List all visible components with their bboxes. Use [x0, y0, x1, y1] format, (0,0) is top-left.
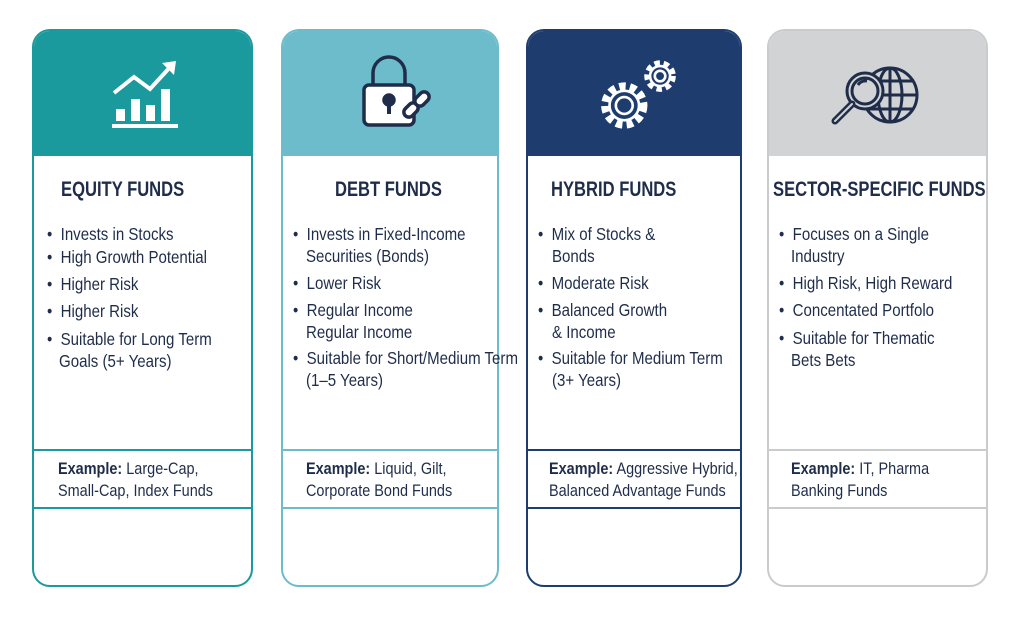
icon: lock and chain: [362, 55, 431, 127]
example: sector: [791, 459, 930, 500]
icon: magnifier and globe: [832, 66, 918, 124]
header: hybrid: [528, 31, 740, 156]
heading: hybrid: HYBRID FUNDS: [551, 178, 676, 201]
panel: sector-specific funds: • Concentated Portfolo: [779, 300, 934, 320]
example: sector: Example: IT, Pharma: [791, 459, 929, 478]
panel: equity funds: Goals (5+ Years): [59, 351, 172, 371]
panel: sector-specific funds: Industry: [791, 246, 845, 266]
panel: debt funds: Regular Income: [306, 322, 412, 342]
panel: sector-specific funds: [767, 29, 988, 587]
panel: hybrid funds: & Income: [552, 322, 616, 342]
panel: hybrid funds: Bonds: [552, 246, 595, 266]
example: sector: Banking Funds: [791, 481, 887, 500]
panel: debt funds: [281, 29, 499, 587]
bullets: sector: [779, 224, 952, 370]
example: equity: Example: Large-Cap,: [58, 459, 199, 478]
example: hybrid: Balanced Advantage Funds: [549, 481, 726, 500]
panel: equity funds: • Higher Risk: [47, 301, 138, 321]
panel: hybrid funds: • Mix of Stocks &: [538, 224, 655, 244]
panel: sector-specific funds: • Suitable for Thematic: [779, 328, 935, 348]
example: equity: [58, 459, 213, 500]
panel: hybrid funds: (3+ Years): [552, 370, 621, 390]
header: equity: [34, 31, 251, 156]
panel: equity funds: • High Growth Potential: [47, 247, 207, 267]
panel: equity funds: [32, 29, 253, 587]
panel: debt funds: • Invests in Fixed-Income: [293, 224, 466, 244]
example: debt: Example: Liquid, Gilt,: [306, 459, 447, 478]
example: equity: Small-Cap, Index Funds: [58, 481, 213, 500]
panel: debt funds: • Suitable for Short/Medium Term: [293, 348, 518, 368]
bullets: equity: [47, 224, 212, 371]
panel: hybrid funds: [526, 29, 742, 587]
bullets: hybrid: [538, 224, 723, 390]
example: debt: [306, 459, 452, 500]
panel: equity funds: • Suitable for Long Term: [47, 329, 212, 349]
example: hybrid: Example: Aggressive Hybrid,: [549, 459, 738, 478]
panel: debt funds: • Regular Income: [293, 300, 413, 320]
panel: hybrid funds: • Suitable for Medium Term: [538, 348, 723, 368]
panel: sector-specific funds: • High Risk, High Reward: [779, 273, 952, 293]
header: debt: [283, 31, 497, 156]
header: sector: [769, 31, 986, 156]
panel: debt funds: • Lower Risk: [293, 273, 381, 293]
heading: debt: DEBT FUNDS: [335, 178, 442, 201]
panel: sector-specific funds: Bets Bets: [791, 350, 855, 370]
panel: sector-specific funds: • Focuses on a Single: [779, 224, 929, 244]
heading: equity: EQUITY FUNDS: [61, 178, 184, 201]
example: debt: Corporate Bond Funds: [306, 481, 452, 500]
panel: debt funds: Securities (Bonds): [306, 246, 429, 266]
panel: equity funds: • Higher Risk: [47, 274, 138, 294]
bullets: debt: [293, 224, 518, 390]
panel: debt funds: (1–5 Years): [306, 370, 383, 390]
icon: growth chart: [112, 61, 178, 128]
panel: hybrid funds: • Balanced Growth: [538, 300, 667, 320]
heading: sector: SECTOR-SPECIFIC FUNDS: [773, 178, 986, 201]
example: hybrid: [549, 459, 738, 500]
panel: hybrid funds: • Moderate Risk: [538, 273, 649, 293]
panel: equity funds: • Invests in Stocks: [47, 224, 174, 244]
icon: gears: [601, 60, 676, 129]
